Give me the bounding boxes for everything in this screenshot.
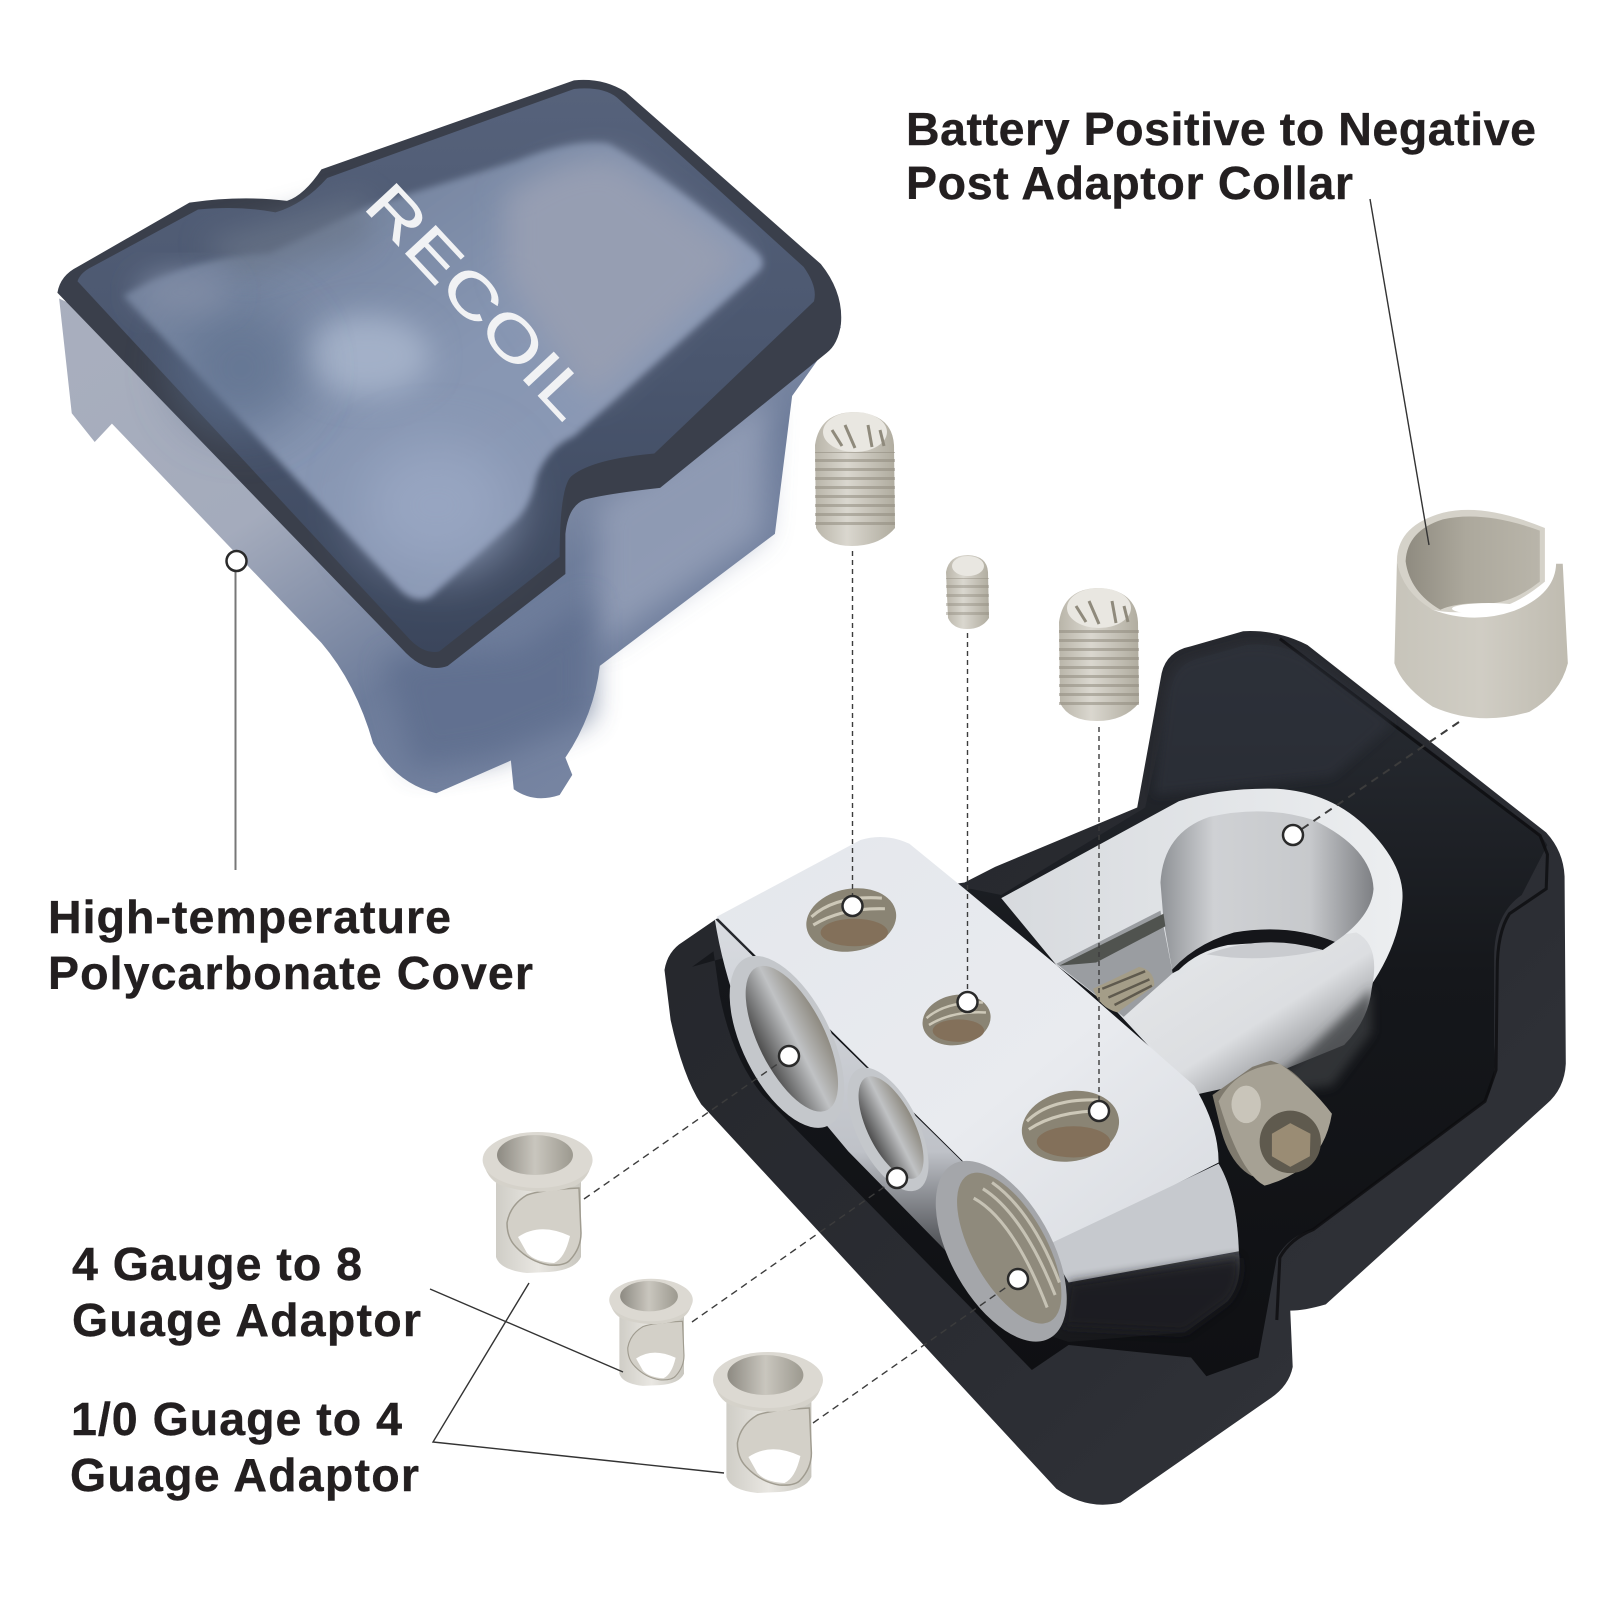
- panel: polycarbonate cover: [57, 80, 841, 798]
- adaptor collar: [1394, 510, 1568, 718]
- collar rear wall: [1397, 510, 1545, 612]
- label: 1/0 gauge adaptor: [70, 1393, 419, 1501]
- adaptor large top: [483, 1132, 593, 1273]
- cover skirt: [59, 287, 841, 798]
- clamp slit: [1056, 911, 1173, 1017]
- clamp lower shoulder: [1118, 932, 1374, 1095]
- top hole 3: [1016, 1083, 1125, 1169]
- collar inside: [1406, 517, 1540, 610]
- label: adaptor collar: Post Adaptor Collar: [906, 157, 1353, 209]
- cover lid rim: [57, 80, 841, 668]
- block top face: [717, 837, 1219, 1244]
- logo: RECOIL: RECOIL: [352, 170, 603, 432]
- bore slot: [1167, 929, 1335, 976]
- leader lines: [236, 199, 1429, 1473]
- label: 4 gauge adaptor: [72, 1238, 421, 1346]
- block corner highlight: [1047, 1164, 1239, 1282]
- terminal block: [706, 837, 1240, 1363]
- label: cover: High-temperature: [48, 891, 451, 943]
- base rim edge: [1277, 639, 1547, 1320]
- cover side shading: [385, 396, 769, 769]
- label: 4 gauge adaptor: 4 Gauge to 8: [72, 1238, 362, 1290]
- top hole 1: [801, 881, 901, 959]
- label: cover: Polycarbonate Cover: [48, 947, 533, 999]
- cover lid band: [77, 88, 815, 652]
- base outer tub: [664, 631, 1566, 1505]
- inner wall highlight: [1154, 644, 1393, 795]
- block front face: [715, 919, 1240, 1342]
- front bore 1: [706, 938, 868, 1146]
- front bore 2: [831, 1055, 945, 1204]
- set screw large: [815, 412, 895, 546]
- clamp bore: [1160, 811, 1374, 973]
- label: adaptor collar: Battery Positive to Negative: [906, 103, 1536, 155]
- base interior: [692, 645, 1547, 1376]
- front bore 3: [909, 1139, 1094, 1363]
- set screw medium: [1059, 588, 1139, 721]
- lid highlights: [138, 158, 746, 568]
- set screw small: [946, 555, 989, 629]
- label: 1/0 gauge adaptor: Guage Adaptor: [70, 1449, 419, 1501]
- adaptor small: [609, 1279, 693, 1386]
- clamp shadow: [1252, 989, 1372, 1095]
- side bolt: [1213, 1061, 1332, 1186]
- cover top face: [123, 142, 763, 600]
- clamp arm: [1001, 789, 1403, 1095]
- top hole 2: [919, 989, 995, 1051]
- panel: terminal base: [664, 631, 1566, 1505]
- label: adaptor collar: [906, 103, 1536, 209]
- small clamp screw: [1093, 967, 1154, 1012]
- label: 1/0 gauge adaptor: 1/0 Guage to 4: [71, 1393, 402, 1445]
- adaptor large bottom: [713, 1352, 823, 1493]
- collar body: [1394, 561, 1568, 718]
- label: cover: [48, 891, 533, 999]
- marker dots: [226, 551, 1303, 1289]
- dashed connector lines: [584, 551, 1459, 1423]
- label: 4 gauge adaptor: Guage Adaptor: [72, 1294, 421, 1346]
